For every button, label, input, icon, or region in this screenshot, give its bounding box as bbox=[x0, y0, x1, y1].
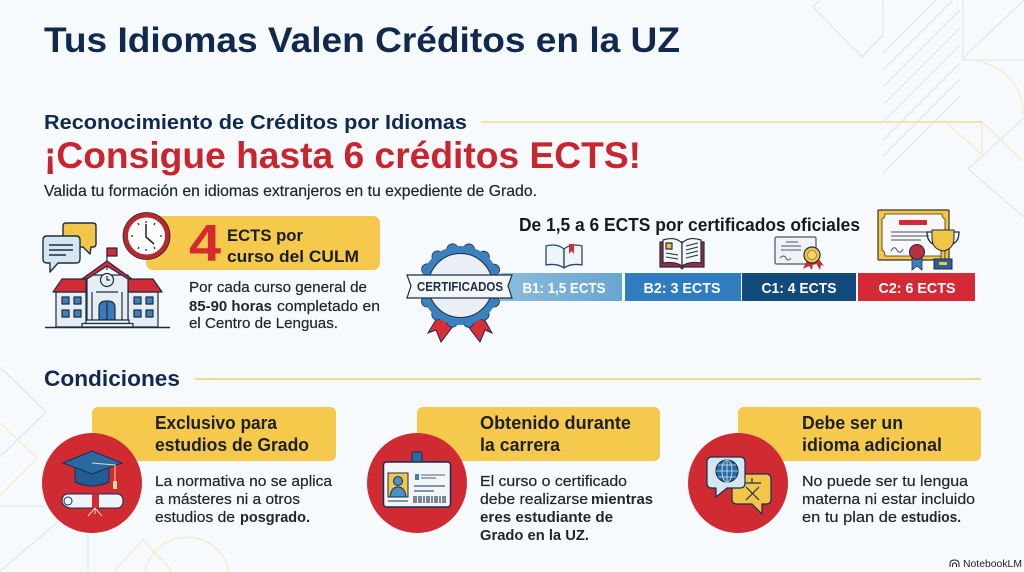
card heading: idioma adicional bbox=[802, 435, 942, 455]
card heading bbox=[155, 413, 309, 455]
card text: mientras bbox=[591, 491, 653, 508]
CULM description bbox=[189, 279, 380, 332]
icon circle bbox=[688, 433, 788, 533]
ECTS per course label bbox=[227, 226, 359, 266]
card text: en tu plan de bbox=[802, 509, 897, 526]
badge: certificados bbox=[407, 248, 512, 342]
card text: posgrado. bbox=[240, 509, 310, 526]
card text: La normativa no se aplica bbox=[155, 473, 333, 490]
card heading: la carrera bbox=[480, 435, 561, 455]
section heading: reconocimiento: Reconocimiento de Créditos por Idiomas bbox=[44, 112, 467, 134]
card heading: Obtenido durante bbox=[480, 413, 631, 433]
icon: school bbox=[45, 248, 170, 328]
CULM description: 85-90 horas bbox=[189, 298, 272, 315]
icon: open book B2 bbox=[660, 239, 704, 269]
icon: diploma and trophy C2 bbox=[878, 210, 959, 270]
intro text: Valida tu formación en idiomas extranjeros en tu expediente de Grado. bbox=[44, 183, 537, 200]
icon: certificate C1 bbox=[775, 237, 824, 270]
card text: No puede ser tu lengua bbox=[802, 473, 969, 490]
card heading: Exclusivo para bbox=[155, 413, 278, 433]
ECTS yellow box bbox=[146, 216, 380, 270]
card heading: estudios de Grado bbox=[155, 435, 309, 455]
level bar B1 bbox=[500, 273, 622, 301]
card text bbox=[155, 473, 333, 526]
card text: debe realizarse bbox=[480, 491, 588, 508]
level bar C1 bbox=[742, 273, 856, 301]
CULM description: completado en bbox=[277, 298, 380, 315]
badge: certificados: CERTIFICADOS bbox=[417, 280, 503, 294]
ECTS per course label: ECTS por bbox=[227, 226, 303, 245]
level bar C2 bbox=[858, 273, 975, 301]
card text: El curso o certificado bbox=[480, 473, 627, 490]
icon circle bbox=[367, 433, 467, 533]
card header box bbox=[92, 407, 336, 461]
icon: clock bbox=[123, 212, 170, 260]
icon circle bbox=[42, 433, 142, 533]
card text: a másteres ni a otros bbox=[155, 491, 300, 508]
level bar B2: B2: 3 ECTS bbox=[644, 280, 720, 297]
big number 4: 4 bbox=[189, 215, 221, 273]
card text: materna ni estar incluido bbox=[802, 491, 975, 508]
card text: eres estudiante de bbox=[480, 509, 613, 526]
icon: book B1 bbox=[546, 244, 582, 268]
ECTS per course label: curso del CULM bbox=[227, 247, 359, 266]
section heading: condiciones: Condiciones bbox=[44, 366, 180, 391]
CULM description: el Centro de Lenguas. bbox=[189, 315, 338, 332]
icon: graduation cap and diploma bbox=[62, 451, 123, 516]
card heading bbox=[480, 413, 631, 455]
CULM description: Por cada curso general de bbox=[189, 279, 367, 296]
card text: estudios de bbox=[155, 509, 235, 526]
headline: ¡Consigue hasta 6 créditos ECTS! bbox=[44, 135, 641, 176]
card text: Grado en la UZ. bbox=[480, 527, 589, 544]
card header box bbox=[417, 407, 660, 461]
card text bbox=[802, 473, 975, 526]
panel: exclusivo para grado bbox=[42, 407, 336, 533]
level bar B1: B1: 1,5 ECTS bbox=[522, 280, 606, 297]
card heading: Debe ser un bbox=[802, 413, 903, 433]
certificates heading: De 1,5 a 6 ECTS por certificados oficiales bbox=[519, 215, 860, 235]
NotebookLM watermark: NotebookLM bbox=[963, 558, 1022, 570]
card text: estudios. bbox=[901, 509, 961, 526]
card heading bbox=[802, 413, 942, 455]
level bar B2 bbox=[625, 273, 741, 301]
icon: language bubbles bbox=[707, 457, 771, 514]
panel: obtenido durante la carrera bbox=[367, 407, 660, 544]
panel: CULM bbox=[43, 212, 380, 332]
icon: ID card bbox=[384, 452, 450, 507]
level bar C1: C1: 4 ECTS bbox=[762, 280, 836, 297]
card text bbox=[480, 473, 653, 544]
icon: chat bubbles bbox=[43, 223, 96, 272]
panel: certificados bbox=[407, 210, 975, 342]
panel: idioma adicional bbox=[688, 407, 981, 533]
level bar C2: C2: 6 ECTS bbox=[878, 280, 956, 297]
title: Tus Idiomas Valen Créditos en la UZ bbox=[44, 21, 680, 60]
card header box bbox=[738, 407, 981, 461]
